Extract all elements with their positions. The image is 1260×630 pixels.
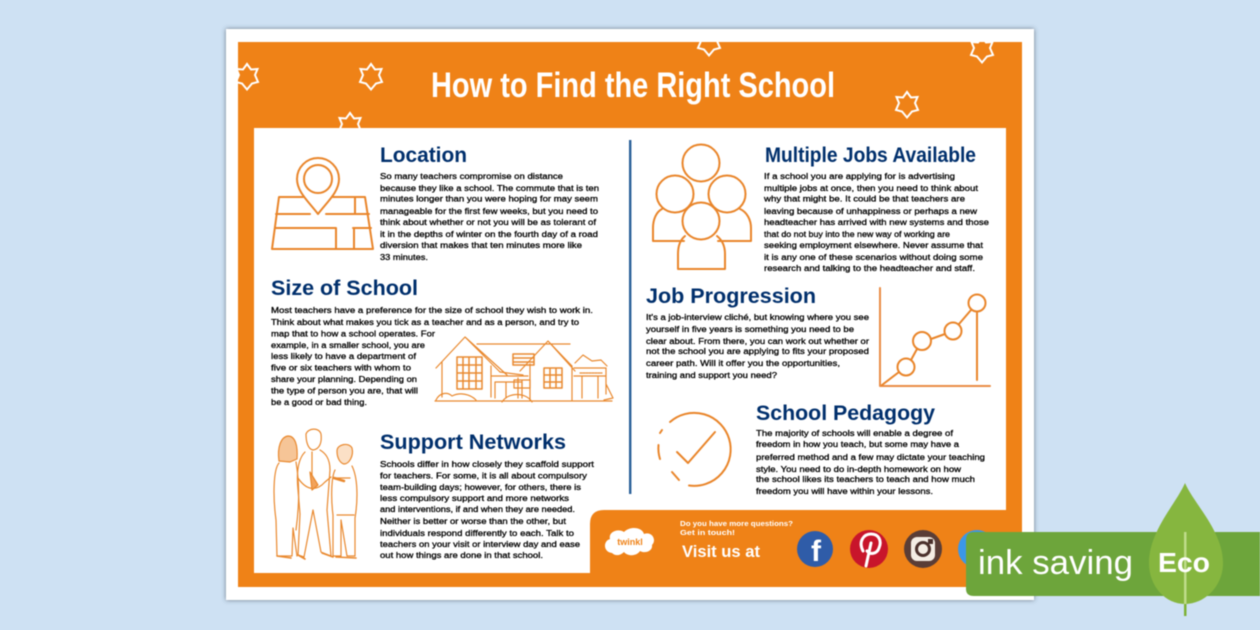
text: location: because they like a school. The commute that is ten (380, 183, 599, 193)
text: multiple jobs available: If a school you are applying for is advertising (764, 171, 955, 181)
heading: location: Location (380, 144, 467, 167)
text: multiple jobs available: that do not buy into the new way of working are (764, 229, 950, 239)
text: size of school: the type of person you are, that will (271, 386, 418, 396)
text: school pedagogy: preferred method and a few may dictate your teaching (756, 452, 985, 462)
icon: instagram (904, 530, 942, 568)
text: school pedagogy: freedom you will have within your lessons. (756, 486, 933, 496)
text: size of school: Think about what makes you tick as a teacher and as a person, and try to (271, 317, 579, 327)
decorative stars (237, 41, 995, 129)
icon: dashed circle with tick (658, 413, 731, 486)
text: location: minutes longer than you were hoping for may seem (380, 194, 598, 204)
icon: map pin (272, 158, 373, 249)
badge: ink saving eco (966, 483, 1260, 616)
text: support networks: team-building days; however, for others, there is (380, 482, 581, 492)
text: support networks: individuals respond differently to each. Talk to (380, 528, 574, 538)
icon: twitter partly hidden (958, 530, 996, 568)
text: location (380, 171, 599, 262)
poster sheet (226, 29, 1034, 600)
text: job progression: not the school you are applying to fits your proposed (646, 346, 869, 356)
text: school pedagogy: The majority of schools will enable a degree of (756, 428, 954, 438)
panel: size of school (271, 277, 613, 407)
text: contact prompt: Do you have more questions? (680, 519, 793, 528)
panel: multiple jobs available (653, 144, 989, 273)
logo: twinkl cloud (605, 528, 654, 555)
text: job progression: training and support you need? (646, 370, 777, 380)
text: school pedagogy: style. You need to do in-depth homework on how (756, 464, 962, 474)
heading: size of school: Size of School (271, 277, 418, 300)
icon: group of people (653, 144, 751, 269)
text: size of school: less likely to have a department of (271, 351, 417, 361)
text: support networks: for teachers. For some, it is all about compulsory (380, 470, 588, 480)
text: size of school: example, in a smaller school, you are (271, 340, 425, 350)
panel: job progression (646, 285, 990, 386)
heading: school pedagogy: School Pedagogy (756, 402, 935, 425)
text: multiple jobs available: multiple jobs at once, then you need to think about (764, 183, 979, 193)
text: contact prompt: Get in touch! (680, 528, 735, 537)
text: multiple jobs available: why that might be. It could be that teachers are (763, 194, 965, 204)
title: How to Find the Right School (431, 66, 835, 105)
text: size of school: five or six teachers with whom to (271, 362, 411, 372)
text: job progression: career path. Will it offer you the opportunities, (646, 358, 840, 368)
text: location: So many teachers compromise on distance (380, 171, 563, 181)
text: school pedagogy: freedom in how you teach, but some may have a (756, 439, 959, 449)
icon: progress line chart (880, 288, 990, 386)
text: size of school: Most teachers have a preference for the size of school they wish to work in. (271, 305, 593, 315)
text: support networks: out how things are done in that school. (380, 550, 543, 560)
text: location: think about whether or not you will be as tolerant of (380, 217, 597, 227)
icon: facebook: f (811, 535, 822, 568)
icon: pinterest (850, 530, 888, 568)
text: multiple jobs available: it is any one of these scenarios without doing some (764, 252, 983, 262)
text: size of school: map that to how a school operates. For (271, 328, 435, 338)
text: location: manageable for the first few weeks, but you need to (380, 206, 598, 216)
text: support networks: less compulsory support and more networks (380, 493, 569, 503)
text: multiple jobs available: leaving because of unhappiness or perhaps a new (764, 206, 978, 216)
text: support networks (380, 459, 595, 560)
text: size of school (271, 305, 593, 407)
text: contact prompt: Visit us at (682, 542, 760, 561)
text: multiple jobs available: seeking employment elsewhere. Never assume that (764, 240, 984, 250)
text: support networks: Schools differ in how closely they scaffold support (380, 459, 595, 469)
label: ink saving: ink saving (978, 544, 1133, 582)
heading: support networks: Support Networks (380, 431, 566, 454)
text: job progression: It's a job-interview cliché, but knowing where you see (646, 312, 869, 322)
text: job progression (646, 312, 869, 380)
text: multiple jobs available: headteacher has arrived with new systems and those (764, 217, 989, 227)
icon: school building (435, 337, 613, 402)
text: job progression: yourself in five years is something you need to be (646, 324, 854, 334)
panel: location (272, 144, 599, 262)
heading: multiple jobs available: Multiple Jobs Available (765, 144, 976, 167)
text: location: it in the depths of winter on the fourth day of a road (380, 229, 598, 239)
text: size of school: share your planning. Depending on (271, 374, 417, 384)
panel: support networks (274, 429, 595, 560)
label: eco: Eco (1158, 547, 1210, 578)
text: job progression: clear about. From there, you can work out whether or (646, 336, 869, 346)
centre divider (629, 140, 631, 494)
heading: job progression: Job Progression (646, 285, 816, 308)
text: support networks: Neither is better or worse than the other, but (380, 516, 567, 526)
text: school pedagogy (756, 428, 985, 496)
text: contact prompt (680, 519, 793, 561)
text: support networks: teachers on your visit or interview day and ease (380, 539, 580, 549)
text: school pedagogy: the school likes its teachers to teach and how much (756, 474, 975, 484)
logo: twinkl cloud: twinkl (617, 537, 643, 547)
icon: facebook (797, 531, 833, 568)
panel: school pedagogy (658, 402, 985, 496)
text: location: 33 minutes. (380, 252, 428, 262)
text: size of school: be a good or bad thing. (271, 397, 367, 407)
text: location: diversion that makes that ten minutes more like (380, 240, 582, 250)
icon: leaf (1149, 483, 1223, 616)
text: support networks: and interventions, if and when they are needed. (380, 504, 575, 514)
footer banner (590, 510, 1006, 573)
text: multiple jobs available (763, 171, 989, 273)
text: multiple jobs available: research and talking to the headteacher and staff. (764, 263, 975, 273)
icon: group of three people sketch (274, 429, 357, 559)
